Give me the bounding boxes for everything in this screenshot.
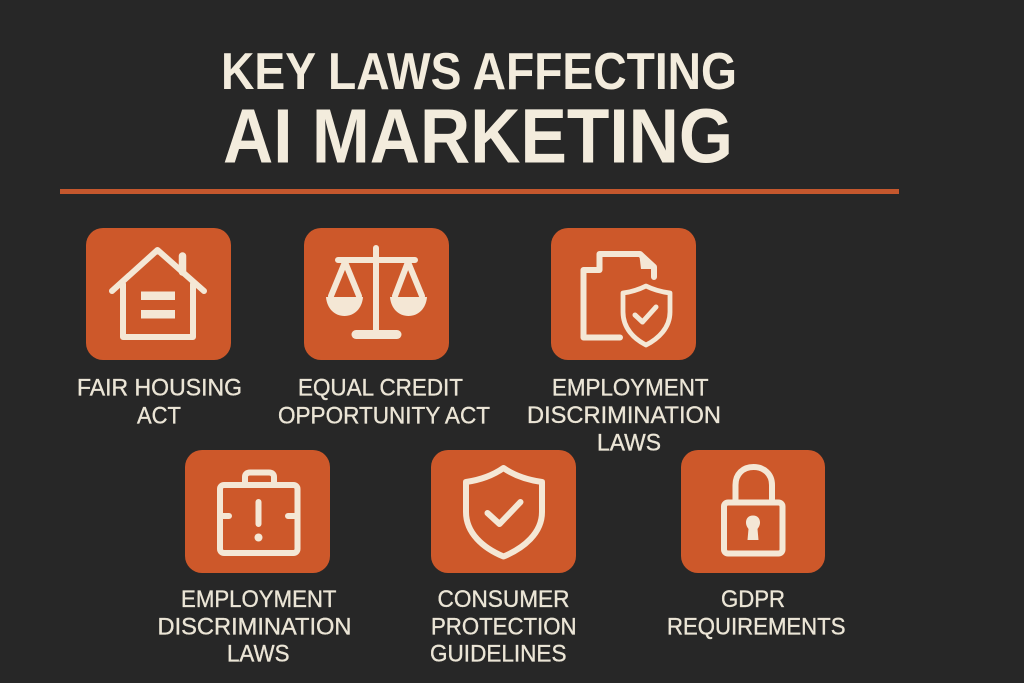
label: FAIR HOUSING <box>77 374 242 402</box>
label <box>430 586 576 668</box>
panel: fair housing act <box>77 228 242 430</box>
label: OPPORTUNITY ACT <box>278 402 490 430</box>
label: ACT <box>137 402 181 430</box>
label: REQUIREMENTS <box>667 614 846 640</box>
panel: employment discrimination laws top <box>527 228 721 456</box>
title: KEY LAWS AFFECTING <box>221 43 737 101</box>
label <box>158 586 352 668</box>
panel: gdpr requirements <box>667 450 846 640</box>
label: EQUAL CREDIT <box>298 374 463 402</box>
icon: house <box>86 228 231 360</box>
label: GUIDELINES <box>430 640 566 668</box>
label: PROTECTION <box>431 614 576 640</box>
label <box>278 374 490 430</box>
label: EMPLOYMENT <box>552 374 709 402</box>
label <box>667 586 846 640</box>
label: DISCRIMINATION <box>527 402 721 429</box>
label: LAWS <box>227 640 290 668</box>
panel: employment discrimination laws bottom <box>158 450 352 668</box>
icon: scales <box>304 228 449 360</box>
icon: briefcase alert <box>185 450 330 573</box>
icon: shield check <box>431 450 576 573</box>
label: LAWS <box>597 430 661 456</box>
label: GDPR <box>721 586 785 613</box>
title <box>221 43 737 180</box>
panel: consumer protection guidelines <box>430 450 576 668</box>
title: AI MARKETING <box>223 94 733 180</box>
label <box>527 374 721 456</box>
label <box>77 374 242 430</box>
label: CONSUMER <box>438 586 570 613</box>
icon: document with shield <box>551 228 696 360</box>
label: DISCRIMINATION <box>158 614 352 640</box>
icon: padlock <box>681 450 825 573</box>
panel: equal credit opportunity act <box>278 228 490 430</box>
label: EMPLOYMENT <box>181 586 337 613</box>
